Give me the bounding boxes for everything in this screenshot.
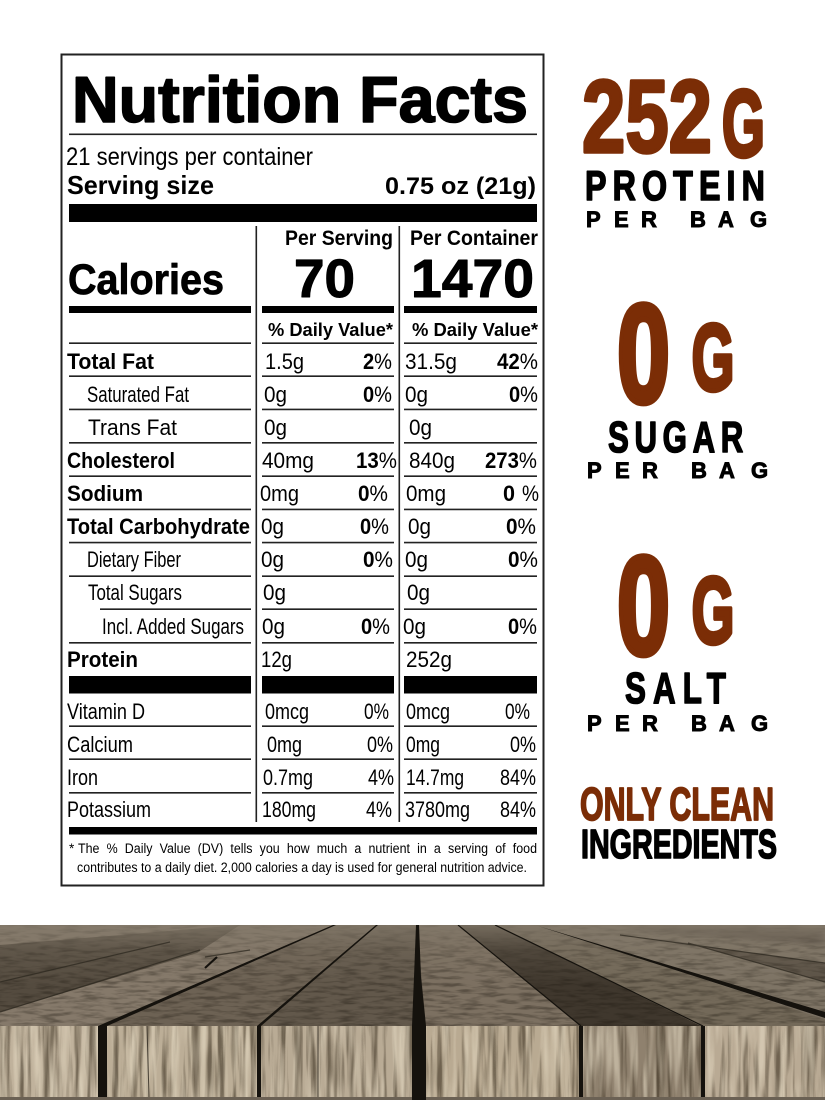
per bag caption: PER BAG — [586, 207, 767, 232]
row: sodium — [67, 481, 539, 506]
serving size label: Serving size — [67, 170, 214, 200]
row: potassium: Potassium — [67, 797, 151, 822]
row: saturated fat: 0% — [363, 382, 392, 407]
row: sodium: 0mg — [406, 481, 446, 506]
table front edge — [0, 1026, 825, 1097]
daily value heading: per serving: % Daily Value* — [268, 320, 393, 340]
row: sodium: % — [522, 481, 539, 506]
row: saturated fat: Saturated Fat — [87, 382, 189, 407]
row: total sugars: 0g — [407, 580, 430, 605]
row: incl. added sugars — [102, 614, 537, 639]
table bottom shadow strip — [0, 1097, 825, 1100]
row: cholesterol: 13% — [356, 448, 397, 473]
per container heading: Per Container — [410, 227, 538, 250]
row: cholesterol — [67, 448, 537, 473]
row: potassium: 180mg — [262, 797, 316, 822]
row: vitamin d: 0mcg — [406, 699, 450, 724]
per bag caption: PER BAG — [587, 458, 768, 483]
row: incl. added sugars: 0g — [403, 614, 426, 639]
row: saturated fat: 0g — [405, 382, 428, 407]
title: Nutrition Facts: Nutrition Facts — [72, 63, 528, 136]
row: trans fat: 0g — [409, 415, 432, 440]
row: total sugars — [88, 580, 430, 605]
row: total fat: 1.5g — [265, 349, 304, 374]
row: incl. added sugars: Incl. Added Sugars — [102, 614, 244, 639]
per serving heading: Per Serving — [285, 227, 393, 250]
row: dietary fiber: 0% — [363, 547, 393, 572]
row: dietary fiber: 0g — [261, 547, 284, 572]
column divider: per serving — [256, 226, 257, 822]
row: dietary fiber: 0g — [405, 547, 428, 572]
row: cholesterol: 840g — [409, 448, 455, 473]
row: dietary fiber — [87, 547, 538, 572]
row: saturated fat: 0% — [509, 382, 538, 407]
big number 252: 252 — [582, 59, 712, 174]
bottom thick bar — [69, 827, 537, 834]
label border — [62, 54, 544, 886]
footnote: * — [69, 841, 75, 856]
row: trans fat: 0g — [264, 415, 287, 440]
row: incl. added sugars: 0g — [262, 614, 285, 639]
stat: 0g sugar per bag — [587, 277, 768, 483]
stat: 252g protein per bag — [582, 59, 771, 232]
big zero: 0 — [617, 529, 670, 684]
row: trans fat — [88, 415, 432, 440]
row: sodium: Sodium — [67, 481, 143, 506]
row: total carbohydrate: Total Carbohydrate — [67, 514, 250, 539]
row: total carbohydrate — [67, 514, 536, 539]
row: cholesterol: 273% — [485, 448, 537, 473]
row: calcium: Calcium — [67, 732, 133, 757]
row: calcium: 0mg — [267, 732, 302, 757]
row: cholesterol: Cholesterol — [67, 448, 175, 473]
calories label: Calories — [68, 256, 224, 304]
row: vitamin d: 0mcg — [265, 699, 309, 724]
row: total fat: 42% — [497, 349, 538, 374]
row: trans fat: Trans Fat — [88, 415, 177, 440]
row: vitamin d: 0% — [364, 699, 389, 724]
footnote: contributes to a daily diet. 2,000 calories a day is used for general nutrition advice. — [77, 860, 527, 875]
thick black bar under serving size — [69, 204, 537, 222]
per bag caption: PER BAG — [587, 711, 768, 736]
row: iron: 4% — [368, 765, 394, 790]
footnote — [69, 841, 537, 875]
row: calcium: 0% — [367, 732, 393, 757]
row: vitamin d — [67, 699, 530, 724]
row: calcium — [67, 732, 536, 757]
row: total fat: 31.5g — [405, 349, 457, 374]
tagline: only clean ingredients — [580, 778, 777, 867]
row: potassium: 84% — [500, 797, 536, 822]
row: iron: 0.7mg — [263, 765, 313, 790]
row: sodium: 0% — [358, 481, 388, 506]
row: protein — [67, 647, 452, 672]
footnote: The % Daily Value (DV) tells you how much a nutrient in a serving of food — [78, 841, 537, 856]
calories per serving: 70 — [294, 249, 355, 309]
servings per container: 21 servings per container — [66, 143, 313, 171]
row: incl. added sugars: 0% — [508, 614, 537, 639]
row: iron: 84% — [500, 765, 536, 790]
row: saturated fat: 0g — [264, 382, 287, 407]
unit G: G — [692, 559, 734, 664]
calories per container: 1470 — [411, 249, 534, 309]
row rules — [69, 342, 537, 794]
thick black bars above vitamins — [69, 676, 537, 694]
unit G: G — [692, 306, 734, 411]
row: sodium: 0 — [503, 481, 515, 506]
row: protein: Protein — [67, 647, 138, 672]
row: iron: 14.7mg — [406, 765, 464, 790]
word SUGAR: SUGAR — [608, 413, 749, 462]
word SALT: SALT — [625, 664, 733, 713]
row: saturated fat — [87, 382, 538, 407]
column divider: per container — [398, 226, 400, 822]
row: total carbohydrate: 0g — [408, 514, 431, 539]
row: iron — [67, 765, 536, 790]
row: potassium: 3780mg — [405, 797, 470, 822]
row: incl. added sugars: 0% — [361, 614, 390, 639]
row: dietary fiber: Dietary Fiber — [87, 547, 181, 572]
row: total sugars: 0g — [263, 580, 286, 605]
panel: nutrition facts label — [62, 54, 544, 886]
row: calcium: 0% — [510, 732, 536, 757]
row: potassium — [67, 797, 536, 822]
row: protein: 12g — [261, 647, 292, 672]
row: dietary fiber: 0% — [508, 547, 538, 572]
row: protein: 252g — [406, 647, 452, 672]
serving size value: 0.75 oz (21g) — [385, 173, 536, 200]
row: total fat: 2% — [363, 349, 392, 374]
row: sodium: 0mg — [260, 481, 299, 506]
row: total sugars: Total Sugars — [88, 580, 182, 605]
big zero: 0 — [617, 277, 670, 432]
stat: 0g salt per bag — [587, 529, 768, 736]
table top surface — [0, 925, 825, 1026]
wooden table — [0, 925, 825, 1100]
row: total carbohydrate: 0% — [360, 514, 389, 539]
thick rules under calories — [69, 306, 537, 313]
row: total carbohydrate: 0g — [261, 514, 284, 539]
row: total carbohydrate: 0% — [506, 514, 536, 539]
row: total fat — [67, 349, 538, 374]
row: calcium: 0mg — [406, 732, 440, 757]
word PROTEIN: PROTEIN — [585, 162, 771, 209]
row: vitamin d: 0% — [505, 699, 530, 724]
row: cholesterol: 40mg — [262, 448, 314, 473]
unit G: G — [722, 72, 765, 177]
row: potassium: 4% — [366, 797, 392, 822]
daily value heading: per container: % Daily Value* — [412, 320, 538, 340]
row: iron: Iron — [67, 765, 98, 790]
row: total fat: Total Fat — [67, 349, 155, 374]
row: vitamin d: Vitamin D — [67, 699, 145, 724]
rule under title — [69, 134, 537, 135]
